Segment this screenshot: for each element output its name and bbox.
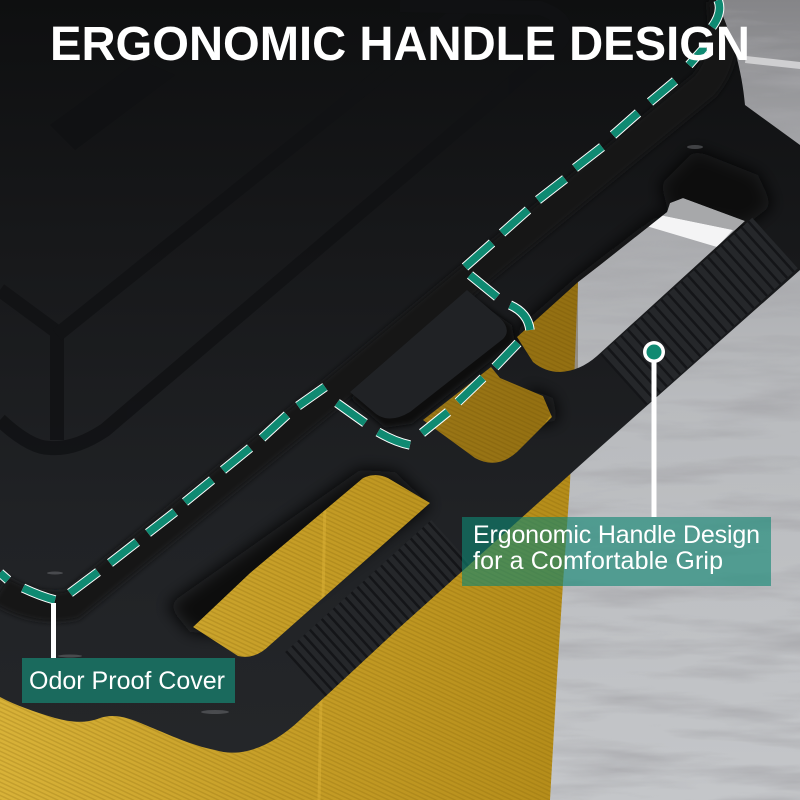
upper grip ribs [623,243,775,380]
title: ERGONOMIC HANDLE DESIGN [50,18,750,71]
yellow fabric bag [0,282,578,800]
label: odor proof cover [22,658,235,703]
lid rim groove [0,0,724,607]
handle recess around windows [168,150,772,636]
lid embossed label recess [50,60,175,150]
lower grip ribs [306,543,452,675]
dashed outline of lid [0,0,720,600]
specular highlights [47,145,703,714]
label: ergonomic handle: for a Comfortable Grip [473,547,723,575]
label: odor proof cover: Odor Proof Cover [29,667,225,695]
latch tab shadow [350,296,515,428]
latch tab [350,290,507,419]
leader line: handle [652,352,656,517]
label: ergonomic handle [462,517,771,586]
label: ergonomic handle: Ergonomic Handle Design [473,521,760,549]
leader line: odor proof cover [51,603,56,659]
lid embossed panel lines [0,295,270,455]
marker dot on handle [643,341,665,363]
